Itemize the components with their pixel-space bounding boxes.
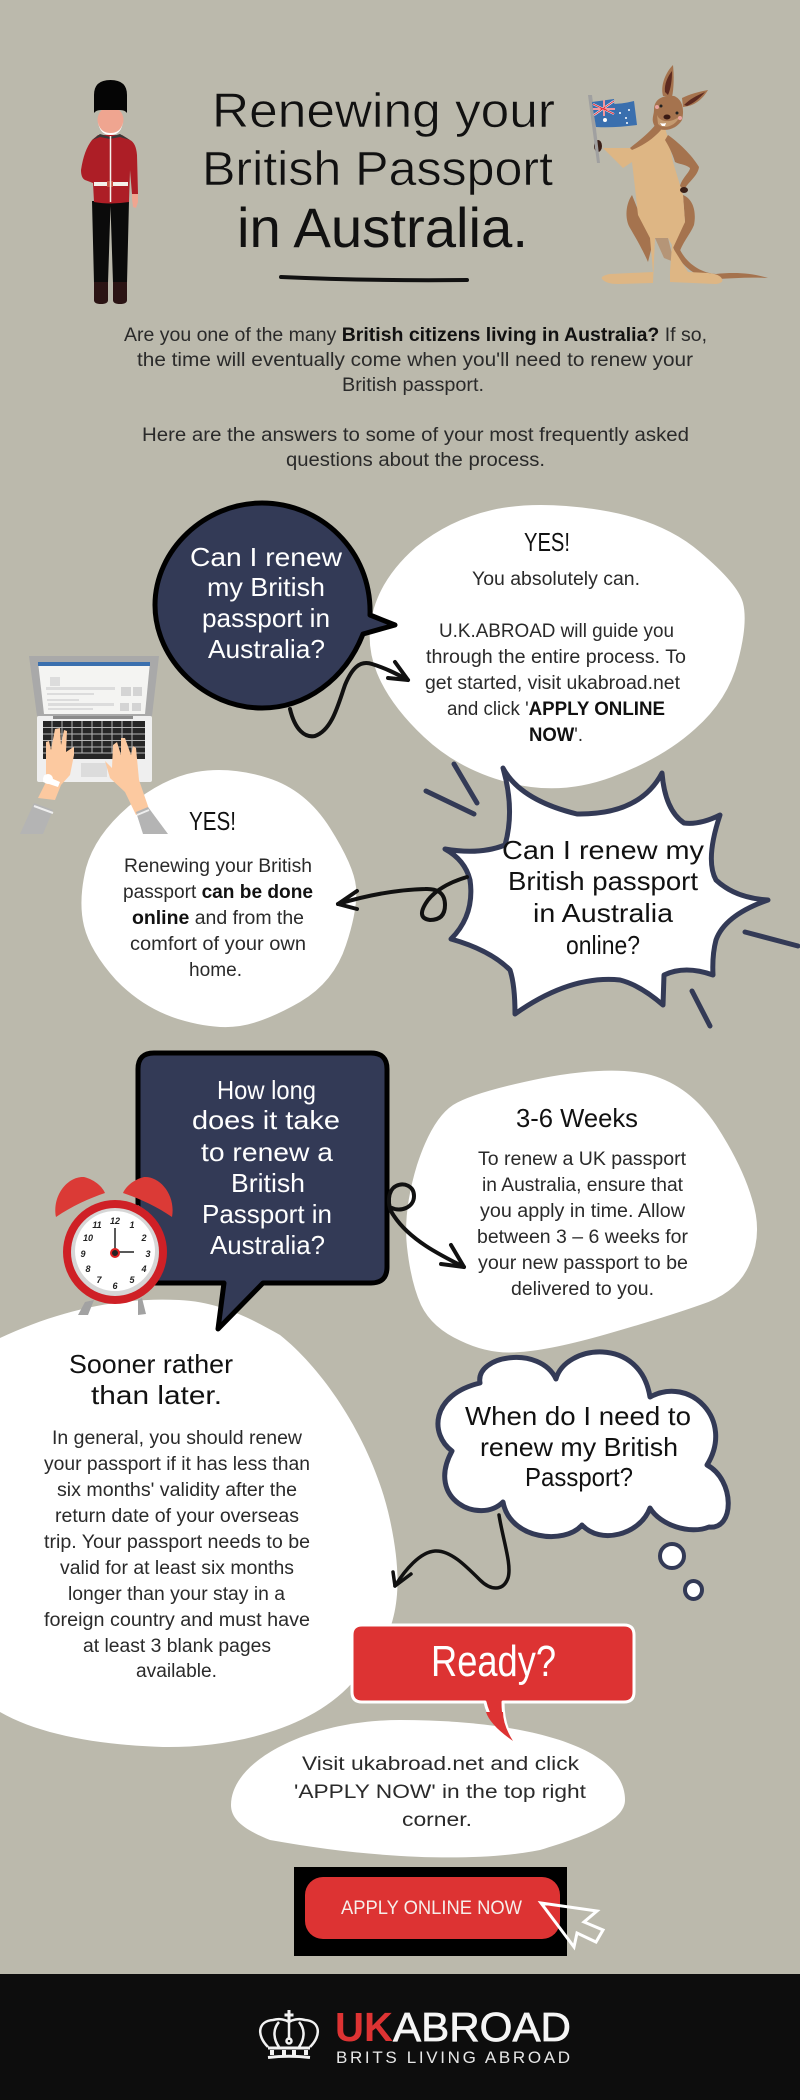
arrow: cloud to answer [393,1515,509,1588]
illustration: kangaroo with Australian flag [588,65,768,284]
answer bubble: yes, you can: You absolutely can. [472,569,640,590]
answer bubble: 3-6 weeks: between 3 – 6 weeks for [477,1227,689,1248]
question bubble: can I renew: my British [207,572,325,602]
intro text [124,325,707,471]
logo: UK Abroad: BRITS LIVING ABROAD [336,2048,570,2067]
illustration: red alarm clock: 7 [96,1275,102,1285]
answer bubble: 3-6 weeks: delivered to you. [511,1279,654,1300]
question burst: online renewal: Can I renew my [502,835,704,865]
title [202,85,555,280]
title: British Passport [202,143,553,196]
red callout: ready [352,1625,634,1740]
illustration: red alarm clock: 5 [129,1275,135,1285]
question burst: online renewal [445,768,768,1014]
illustration: queen's guard [81,80,138,304]
answer bubble: yes, you can: and click 'APPLY ONLINE [447,699,665,720]
question bubble: can I renew: Can I renew [190,542,342,572]
heading: ready: Ready? [431,1637,556,1686]
thought bubbles [660,1544,702,1599]
question cloud: when to renew: Passport? [525,1462,633,1492]
answer bubble: yes, you can: U.K.ABROAD will guide you [439,621,674,642]
question box: how long: to renew a [201,1137,334,1167]
answer bubble: yes online: Renewing your British [124,856,312,877]
big answer bubble: sooner rather than later: trip. Your passport needs to be [44,1532,310,1553]
illustration: red alarm clock: 8 [85,1264,91,1274]
answer bubble: yes, you can: YES! [524,527,570,557]
icon: crown [260,2010,318,2058]
answer bubble: 3-6 weeks: 3-6 Weeks [516,1103,638,1133]
logo: UK Abroad [260,2004,571,2067]
illustration: red alarm clock: 12 [110,1216,120,1226]
icon: cursor [541,1903,603,1947]
footer [0,1974,800,2100]
illustration: red alarm clock: 3 [145,1249,151,1259]
logo: UK Abroad: ABROAD [393,2004,571,2050]
answer bubble: visit ukabroad.net: 'APPLY NOW' in the top right [294,1782,587,1803]
big answer bubble: sooner rather than later [0,1300,398,1747]
answer bubble: yes, you can: get started, visit ukabroad.net [425,673,681,694]
question bubble: can I renew [155,503,395,708]
answer bubble: visit ukabroad.net [231,1712,625,1857]
answer bubble: yes, you can: NOW'. [529,725,583,746]
intro text: the time will eventually come when you'll need to renew your [137,350,694,371]
big answer bubble: sooner rather than later: foreign country and must have [44,1610,310,1631]
illustration: red alarm clock: 6 [112,1281,118,1291]
answer bubble: 3-6 weeks: To renew a UK passport [478,1149,687,1170]
flag [588,95,637,163]
answer bubble: visit ukabroad.net: corner. [402,1810,472,1831]
answer bubble: yes, you can: through the entire process. To [426,647,686,668]
big answer bubble: sooner rather than later: In general, you should renew [52,1428,302,1449]
question bubble: can I renew: passport in [202,603,330,633]
answer bubble: 3-6 weeks: in Australia, ensure that [482,1175,684,1196]
intro text: Here are the answers to some of your most frequently asked [142,425,689,446]
question bubble: can I renew: Australia? [208,634,325,664]
intro text: questions about the process. [286,450,545,471]
answer bubble: 3-6 weeks: your new passport to be [478,1253,688,1274]
question box: how long: British [231,1168,305,1198]
title: in Australia. [237,196,528,259]
big answer bubble: sooner rather than later: valid for at least six months [60,1558,294,1579]
illustration: red alarm clock: 11 [92,1220,102,1230]
question burst: online renewal: in Australia [533,898,674,928]
arrow: burst to answer [338,877,467,920]
question box: how long: does it take [192,1105,340,1135]
illustration: red alarm clock: 4 [140,1264,147,1274]
big answer bubble: sooner rather than later: than later. [91,1380,222,1410]
button: apply online now: APPLY ONLINE NOW [341,1898,522,1919]
arrow: question to answer [290,662,408,736]
question box: how long: How long [217,1075,316,1105]
button: apply online now [294,1867,567,1956]
answer bubble: yes online: passport can be done [123,882,313,903]
title: Renewing your [212,85,555,138]
intro text: Are you one of the many British citizens living in Australia? If so, [124,325,707,346]
illustration: red alarm clock: 2 [140,1233,147,1243]
question box: how long [138,1053,387,1329]
big answer bubble: sooner rather than later: your passport if it has less than [44,1454,310,1475]
question burst: online renewal: British passport [508,866,699,896]
big answer bubble: sooner rather than later: Sooner rather [69,1349,233,1379]
big answer bubble: sooner rather than later: six months' validity after the [57,1480,297,1501]
answer bubble: yes online: home. [189,960,242,981]
burst spark lines [426,764,798,1026]
answer bubble: visit ukabroad.net: Visit ukabroad.net and click [302,1754,580,1775]
answer bubble: yes online [81,770,356,1027]
answer bubble: yes online: YES! [189,806,236,836]
question cloud: when to renew: renew my British [480,1432,678,1462]
intro text: British passport. [342,375,484,396]
question burst: online renewal: online? [566,930,640,960]
big answer bubble: sooner rather than later: available. [136,1661,217,1682]
question box: how long: Passport in [202,1199,332,1229]
illustration: red alarm clock: 1 [129,1220,135,1230]
answer bubble: yes online: online and from the [132,908,304,929]
big answer bubble: sooner rather than later: at least 3 blank pages [83,1636,271,1657]
arrow: box to answer [389,1184,464,1267]
illustration: red alarm clock: 10 [83,1233,93,1243]
illustration: red alarm clock: 9 [80,1249,86,1259]
question cloud: when to renew: When do I need to [465,1401,691,1431]
logo: UK Abroad: UK [335,2004,393,2050]
big answer bubble: sooner rather than later: longer than your stay in a [68,1584,285,1605]
illustration: laptop with hands [20,656,168,834]
question box: how long: Australia? [210,1230,325,1260]
answer bubble: yes online: comfort of your own [130,934,306,955]
big answer bubble: sooner rather than later: return date of your overseas [55,1506,299,1527]
answer bubble: 3-6 weeks: you apply in time. Allow [480,1201,685,1222]
answer bubble: 3-6 weeks [406,1071,757,1353]
answer bubble: yes, you can [370,505,745,788]
question cloud: when to renew [438,1352,728,1537]
illustration: red alarm clock [55,1177,173,1315]
